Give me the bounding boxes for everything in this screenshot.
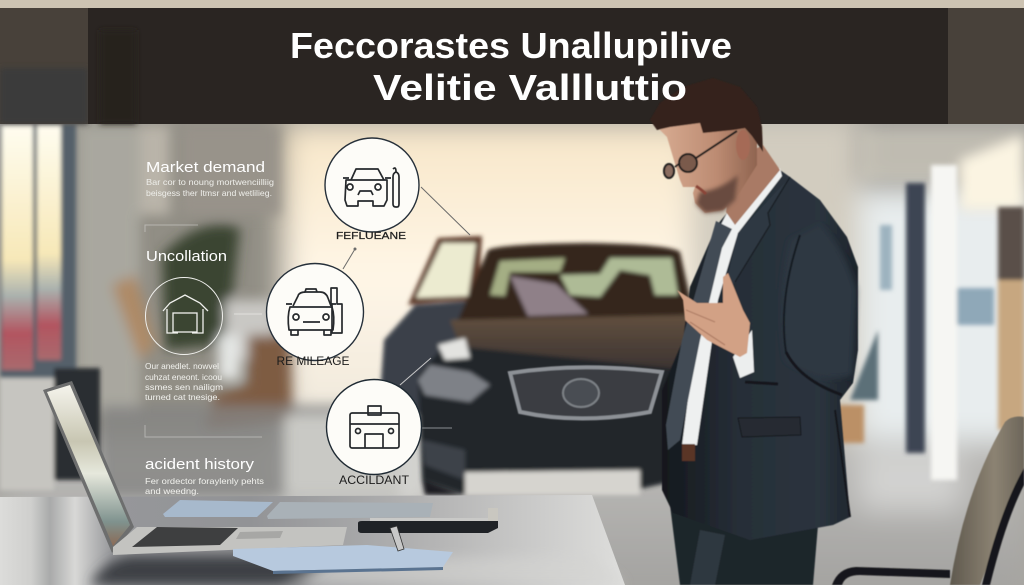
text block: accident history: acident history xyxy=(145,456,255,473)
text block: market demand: Bar cor to noung mortwenciilliig xyxy=(146,177,274,187)
neck xyxy=(726,145,780,225)
text block: condition: cuhzat eneont. icoou xyxy=(145,372,222,382)
label: accident: ACCILDANT xyxy=(339,473,410,487)
text block: accident history: Fer ordector foraylenly pehts xyxy=(145,476,264,486)
jacket xyxy=(662,170,858,540)
text block: accident history: and weedng. xyxy=(145,486,199,496)
table with laptop and papers xyxy=(0,381,625,585)
text block: condition: turned cat tnesige. xyxy=(145,392,220,402)
text block: condition xyxy=(145,361,223,402)
title xyxy=(290,25,732,108)
connector lines xyxy=(343,187,470,428)
title: Feccorastes Unallupilive xyxy=(290,25,732,66)
papers xyxy=(163,500,273,517)
cuff xyxy=(733,330,754,378)
glasses xyxy=(664,131,737,178)
chair xyxy=(832,417,1024,585)
label: top icon: FEFLUEANE xyxy=(336,231,406,242)
icon: car with pump, middle circle xyxy=(266,264,364,360)
trousers xyxy=(670,505,818,585)
shirt and collar xyxy=(682,168,782,445)
tie xyxy=(666,221,732,450)
hand xyxy=(677,273,750,357)
laptop xyxy=(43,381,347,555)
text block: market demand xyxy=(146,159,274,198)
man in suit xyxy=(650,78,858,585)
lapel xyxy=(722,177,790,300)
icon: building, bottom circle xyxy=(326,380,422,474)
title banner xyxy=(0,0,1024,124)
text block: market demand: Market demand xyxy=(146,159,265,176)
hair xyxy=(650,78,763,152)
face xyxy=(657,110,757,213)
text block: condition: Our anedlet. nowvel xyxy=(145,361,219,371)
text block: condition: ssmes sen nailigm xyxy=(145,382,223,392)
label: mileage: RE MILEAGE xyxy=(276,354,350,368)
car grille xyxy=(510,367,662,418)
ear xyxy=(736,130,750,160)
heading: uncollation: Uncollation xyxy=(146,248,227,265)
car xyxy=(380,236,695,495)
title: Velitie Vallluttio xyxy=(373,67,687,108)
text block: market demand: beisgess ther Itmsr and wetlilieg. xyxy=(146,188,272,198)
left annotations frame lines xyxy=(145,225,262,437)
icon: house in outlined circle xyxy=(146,278,262,354)
text block: accident history xyxy=(145,456,264,496)
icon: car with fuel pump, top circle xyxy=(325,138,419,232)
